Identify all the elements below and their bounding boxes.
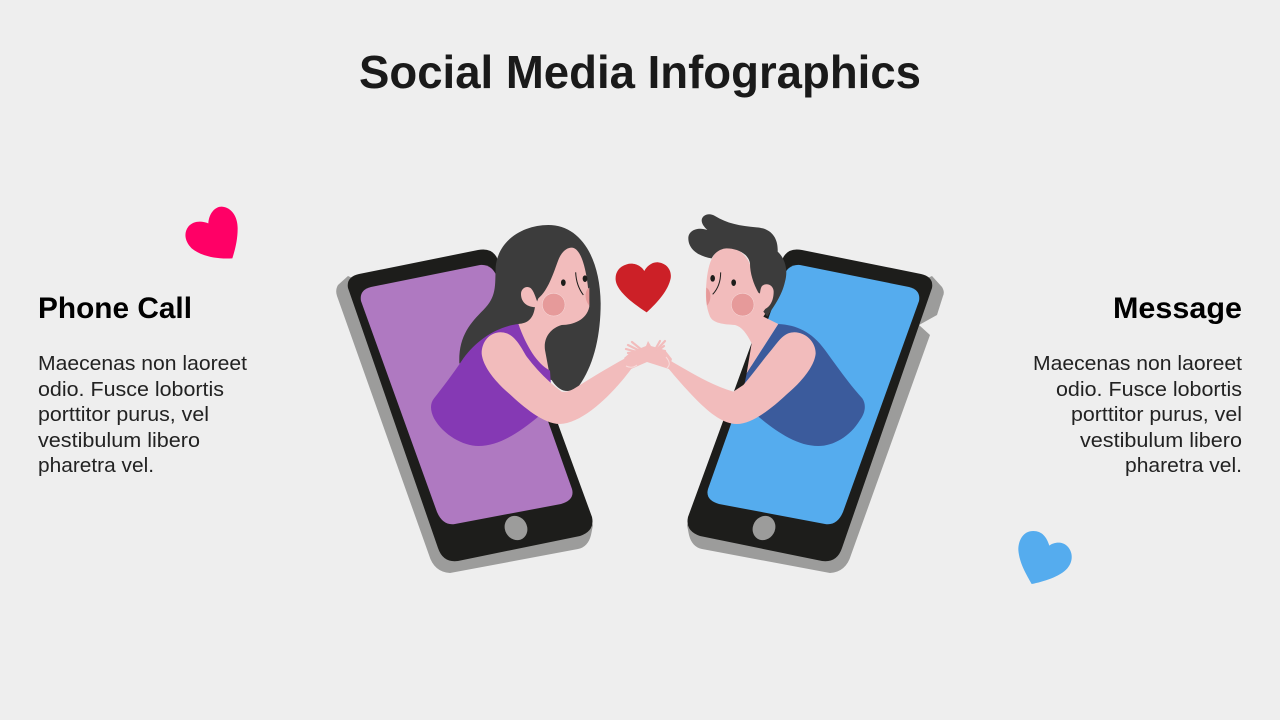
text block: phone call description: vestibulum libero — [38, 430, 200, 452]
cheek — [542, 293, 565, 316]
phone shadow — [336, 276, 593, 573]
palms — [624, 341, 672, 369]
far cheek — [706, 288, 710, 306]
dress — [431, 324, 552, 446]
text block: phone call description: odio. Fusce lobortis — [38, 379, 224, 401]
hair — [688, 214, 786, 317]
nose — [713, 272, 721, 294]
panel: message text — [1033, 292, 1242, 477]
arm — [482, 332, 632, 424]
text block: phone call description: porttitor purus, vel — [38, 404, 209, 426]
text block: message description: pharetra vel. — [1125, 455, 1242, 477]
text block: message description: vestibulum libero — [1080, 430, 1242, 452]
title: Social Media Infographics — [359, 46, 921, 98]
arm — [663, 332, 816, 424]
ear — [758, 284, 774, 310]
home button — [748, 512, 780, 544]
eyes — [561, 275, 587, 286]
text block: message description: Maecenas non laoreet — [1033, 353, 1242, 375]
man figure — [663, 214, 865, 446]
ear — [521, 287, 539, 307]
hair — [459, 225, 601, 391]
text block: phone call description: pharetra vel. — [38, 455, 154, 477]
far cheek — [586, 288, 589, 306]
text block: phone call description — [38, 353, 247, 477]
text block: phone call description: Maecenas non laoreet — [38, 353, 247, 375]
phone screen — [361, 265, 573, 524]
icon: blue heart — [1018, 531, 1072, 584]
text block: message description — [1033, 353, 1242, 477]
fingers — [626, 341, 665, 355]
nose — [576, 272, 583, 295]
heading: phone call: Phone Call — [38, 292, 192, 325]
clasped hands — [624, 341, 672, 369]
face and neck — [706, 248, 778, 373]
woman figure — [431, 225, 632, 446]
phone body — [688, 249, 932, 561]
face and neck — [518, 248, 589, 373]
home button — [500, 512, 532, 544]
phone shadow — [687, 276, 944, 573]
dress — [743, 324, 865, 446]
left phone — [336, 249, 593, 573]
wrist highlights — [626, 357, 669, 368]
icon: pink heart — [185, 207, 238, 259]
cheek — [731, 293, 754, 316]
panel: phone call text — [38, 292, 247, 477]
phone body — [348, 249, 592, 561]
text block: message description: odio. Fusce lobortis — [1056, 379, 1242, 401]
heading: message: Message — [1113, 292, 1242, 325]
right phone — [687, 249, 944, 573]
icon: red heart — [616, 262, 671, 312]
phone screen — [707, 265, 919, 524]
eyes — [710, 275, 736, 286]
text block: message description: porttitor purus, vel — [1071, 404, 1242, 426]
